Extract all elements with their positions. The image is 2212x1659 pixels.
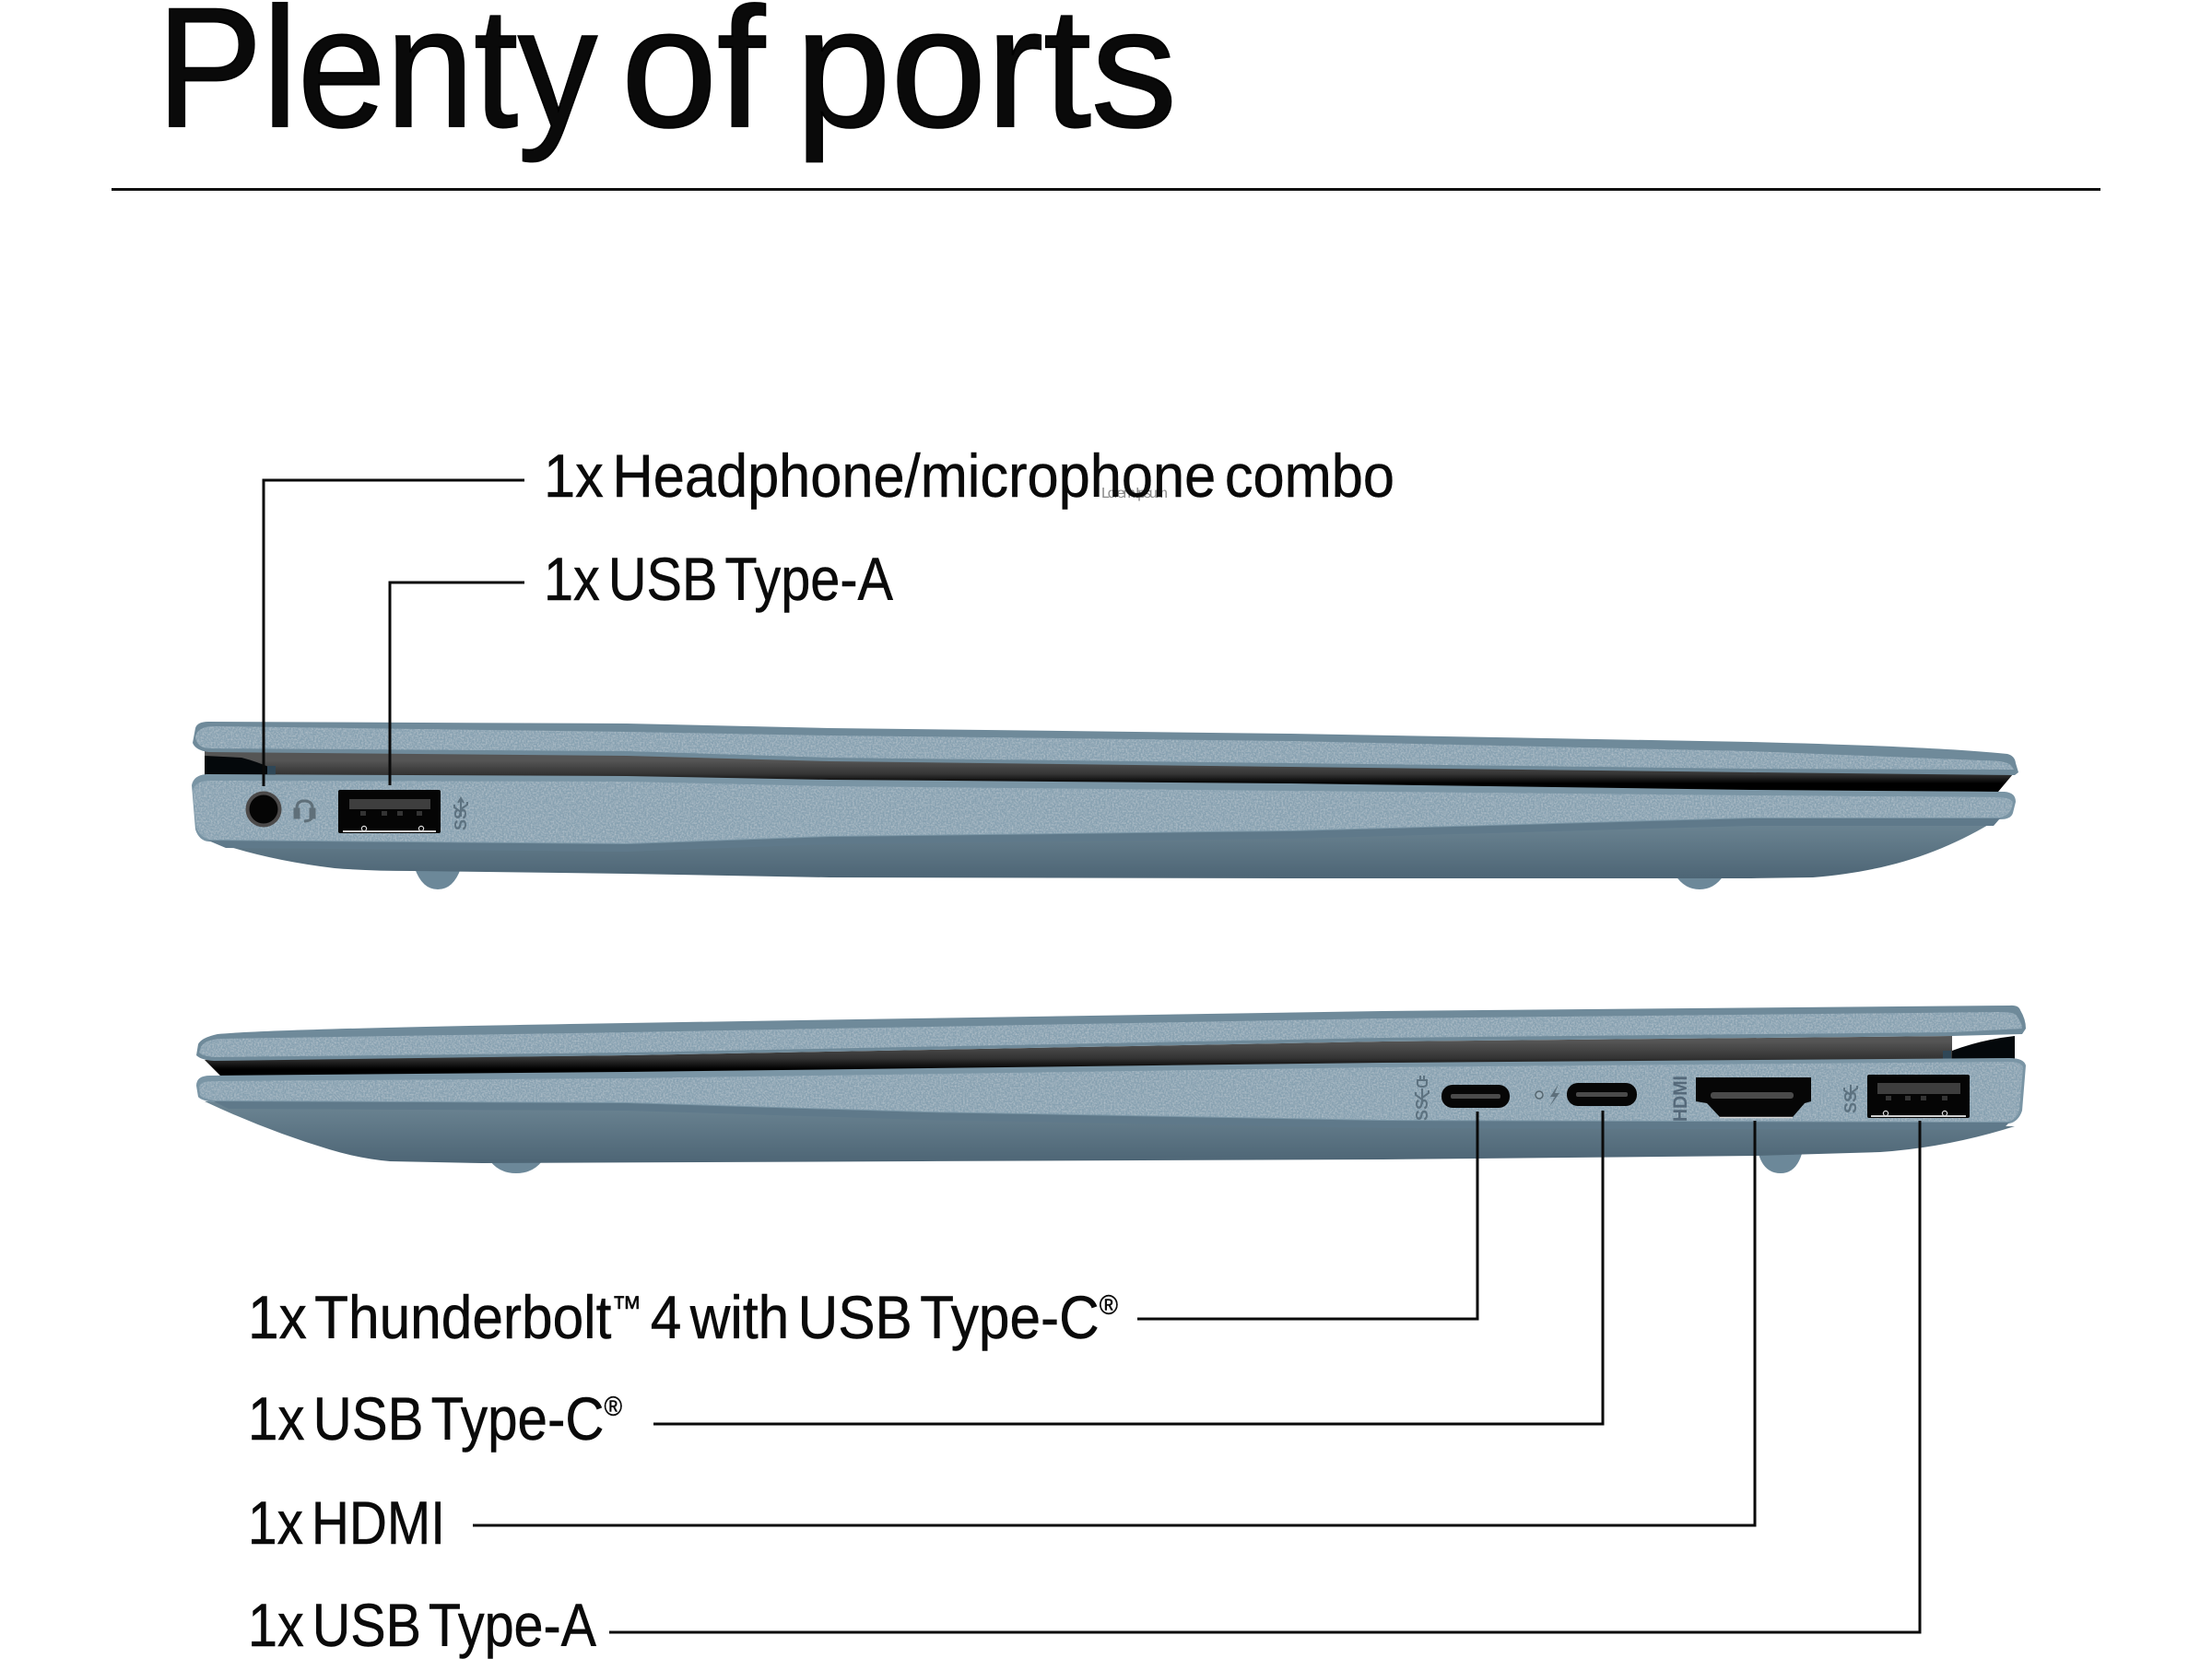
base bbox=[196, 1058, 2026, 1124]
label: USB-C: ® bbox=[604, 1392, 622, 1422]
hinge gap bbox=[205, 1036, 1952, 1077]
laptop: right side view bbox=[196, 1006, 2026, 1173]
label: HDMI: 1x HDMI bbox=[248, 1488, 445, 1557]
leader: USB-A right bbox=[609, 1121, 1920, 1632]
status LED bbox=[1535, 1091, 1543, 1099]
foot right bbox=[1676, 876, 1724, 889]
base bbox=[192, 774, 2016, 846]
leader: Thunderbolt bbox=[1137, 1112, 1477, 1319]
dark hinge opening bbox=[205, 756, 276, 777]
USB-A port bbox=[338, 790, 441, 833]
lid bbox=[193, 722, 2018, 775]
foot left bbox=[490, 1161, 542, 1173]
label: USB-A left: 1x USB Type-A bbox=[544, 545, 893, 613]
icon: HDMI text: HDMI bbox=[1670, 1076, 1691, 1122]
underside bbox=[205, 1097, 2015, 1163]
header rule bbox=[112, 188, 2100, 191]
icon: SS USB bbox=[452, 798, 470, 830]
hinge gap bbox=[205, 751, 2013, 792]
icon: headset bbox=[295, 801, 314, 821]
watermark: Lorem Ipsum bbox=[1101, 486, 1168, 501]
base edge strip bbox=[208, 818, 2000, 852]
lid bbox=[196, 1006, 2026, 1061]
label: Thunderbolt: ™ bbox=[611, 1288, 641, 1326]
label: Thunderbolt: 1x Thunderbolt bbox=[248, 1283, 645, 1351]
USB-A port bbox=[1867, 1075, 1970, 1118]
USB-C port 2 bbox=[1567, 1083, 1637, 1106]
label: Thunderbolt: 4 with USB Type-C bbox=[641, 1283, 1100, 1351]
hinge blue detail bbox=[267, 766, 276, 774]
underside bbox=[201, 817, 2002, 878]
icon: SS USB charge: SS bbox=[1413, 1099, 1431, 1121]
leader: USB-A left bbox=[390, 582, 524, 785]
audio jack bbox=[245, 791, 282, 828]
icon: SS USB charge bbox=[1413, 1076, 1431, 1121]
dark hinge opening bbox=[1952, 1036, 2015, 1060]
foot left bbox=[415, 868, 461, 889]
label: USB-A right: 1x USB Type-A bbox=[248, 1591, 596, 1659]
icon: SS USB: SS bbox=[452, 808, 470, 830]
icon: thunderbolt bbox=[1549, 1084, 1559, 1107]
leader: HDMI bbox=[473, 1121, 1755, 1525]
laptop: left side view bbox=[192, 722, 2018, 889]
label: Thunderbolt: ® bbox=[1100, 1290, 1118, 1321]
hinge blue detail bbox=[1943, 1051, 1951, 1059]
label: headphone: 1x Headphone/microphone combo bbox=[544, 441, 1394, 510]
USB-C port 1 bbox=[1441, 1085, 1510, 1108]
HDMI port bbox=[1696, 1077, 1811, 1117]
leader: USB-C bbox=[653, 1111, 1603, 1424]
foot right bbox=[1759, 1150, 1803, 1173]
label: USB-C: 1x USB Type-C bbox=[248, 1384, 652, 1453]
leader: headphone bbox=[264, 480, 524, 786]
base edge strip bbox=[214, 1101, 2009, 1130]
title bbox=[157, 0, 1177, 163]
icon: SS USB 10: SS bbox=[1841, 1091, 1860, 1113]
